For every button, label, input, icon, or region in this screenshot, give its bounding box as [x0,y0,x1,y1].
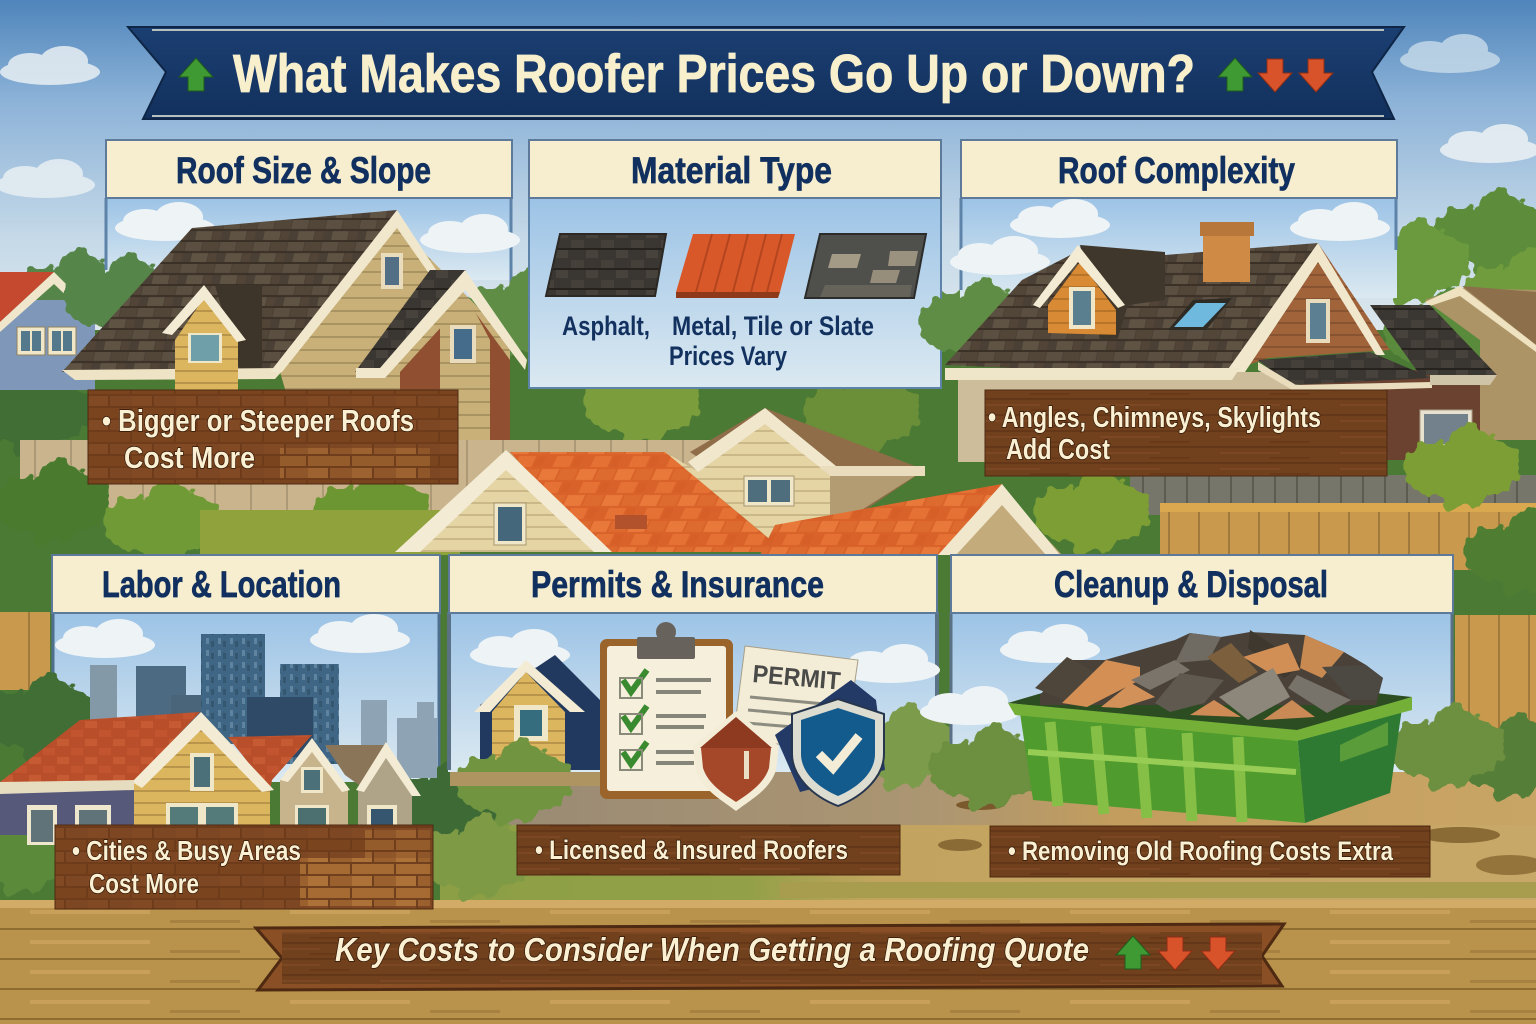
caption: material list: Metal, Tile or Slate [672,311,874,341]
label: removing old roofing [990,826,1430,877]
heading: labor and location: Labor & Location [102,564,341,605]
heading: cleanup and disposal [951,555,1453,613]
icon: blue shield with check [792,699,884,806]
heading: cleanup and disposal: Cleanup & Disposal [1054,564,1328,605]
heading: permits and insurance [449,555,937,613]
panel: roof size and slope [62,198,580,440]
illustration: roofing debris [1035,630,1383,720]
label: licensed and insured roofers: • Licensed & Insured Roofers [535,835,848,865]
heading: labor and location [52,555,440,613]
icon: permit paper: PERMIT [751,660,842,696]
heading: roof complexity: Roof Complexity [1058,150,1295,191]
icon: clipboard checklist [600,622,733,799]
heading: roof complexity [961,140,1397,198]
panel: material type [529,140,941,388]
label: removing old roofing: • Removing Old Roofing Costs Extra [1008,836,1394,866]
panel: cleanup and disposal [920,612,1505,823]
heading: material type: Material Type [631,150,832,191]
illustration: complex house [945,222,1520,509]
label: cities and busy areas: Cost More [89,868,199,899]
label: angles chimneys skylights [985,390,1387,476]
illustration: city skyline [90,634,437,778]
illustration: neighbourhood houses [0,712,421,845]
heading: roof size and slope [106,140,512,198]
illustration: green dumpster back [1008,693,1412,733]
central orange-roof house [395,408,1062,555]
icon: permit paper [733,646,858,750]
title text: What Makes Roofer Prices Go Up or Down? [233,44,1195,104]
illustration: yellow house [450,655,600,824]
footer ribbon [256,924,1284,990]
label: angles chimneys skylights: • Angles, Chimneys, Skylights [988,402,1321,434]
swatch: slate [805,234,926,298]
icon: dark backing block [775,680,885,792]
label: bigger or steeper roofs: • Bigger or Steeper Roofs [102,403,414,438]
label: angles chimneys skylights: Add Cost [1006,434,1110,466]
panel: roof complexity [919,198,1520,509]
swatch: asphalt shingles [546,234,666,296]
illustration: large house [62,210,527,440]
title banner [128,27,1404,119]
icon: green up arrow [179,58,213,91]
footer text: Key Costs to Consider When Getting a Roofing Quote [335,931,1089,968]
panel: permits and insurance [448,612,960,824]
caption: material list [562,311,874,371]
heading: roof size and slope: Roof Size & Slope [176,150,431,191]
illustration: green dumpster [1008,697,1412,823]
icon: red house shield [693,711,779,811]
label: licensed and insured roofers [517,825,900,875]
label: cities and busy areas: • Cities & Busy Areas [72,835,301,866]
caption: material list: Asphalt, [562,311,650,341]
panel: labor and location [0,612,535,899]
label: bigger or steeper roofs: Cost More [124,440,255,475]
caption: material list: Prices Vary [669,341,787,371]
label: cities and busy areas [55,825,433,909]
icon: up and down arrows [1218,58,1333,92]
label: bigger or steeper roofs [88,390,458,484]
heading: permits and insurance: Permits & Insurance [531,564,824,605]
swatch: metal or tile [676,234,795,298]
icon: footer arrows [1116,936,1235,970]
